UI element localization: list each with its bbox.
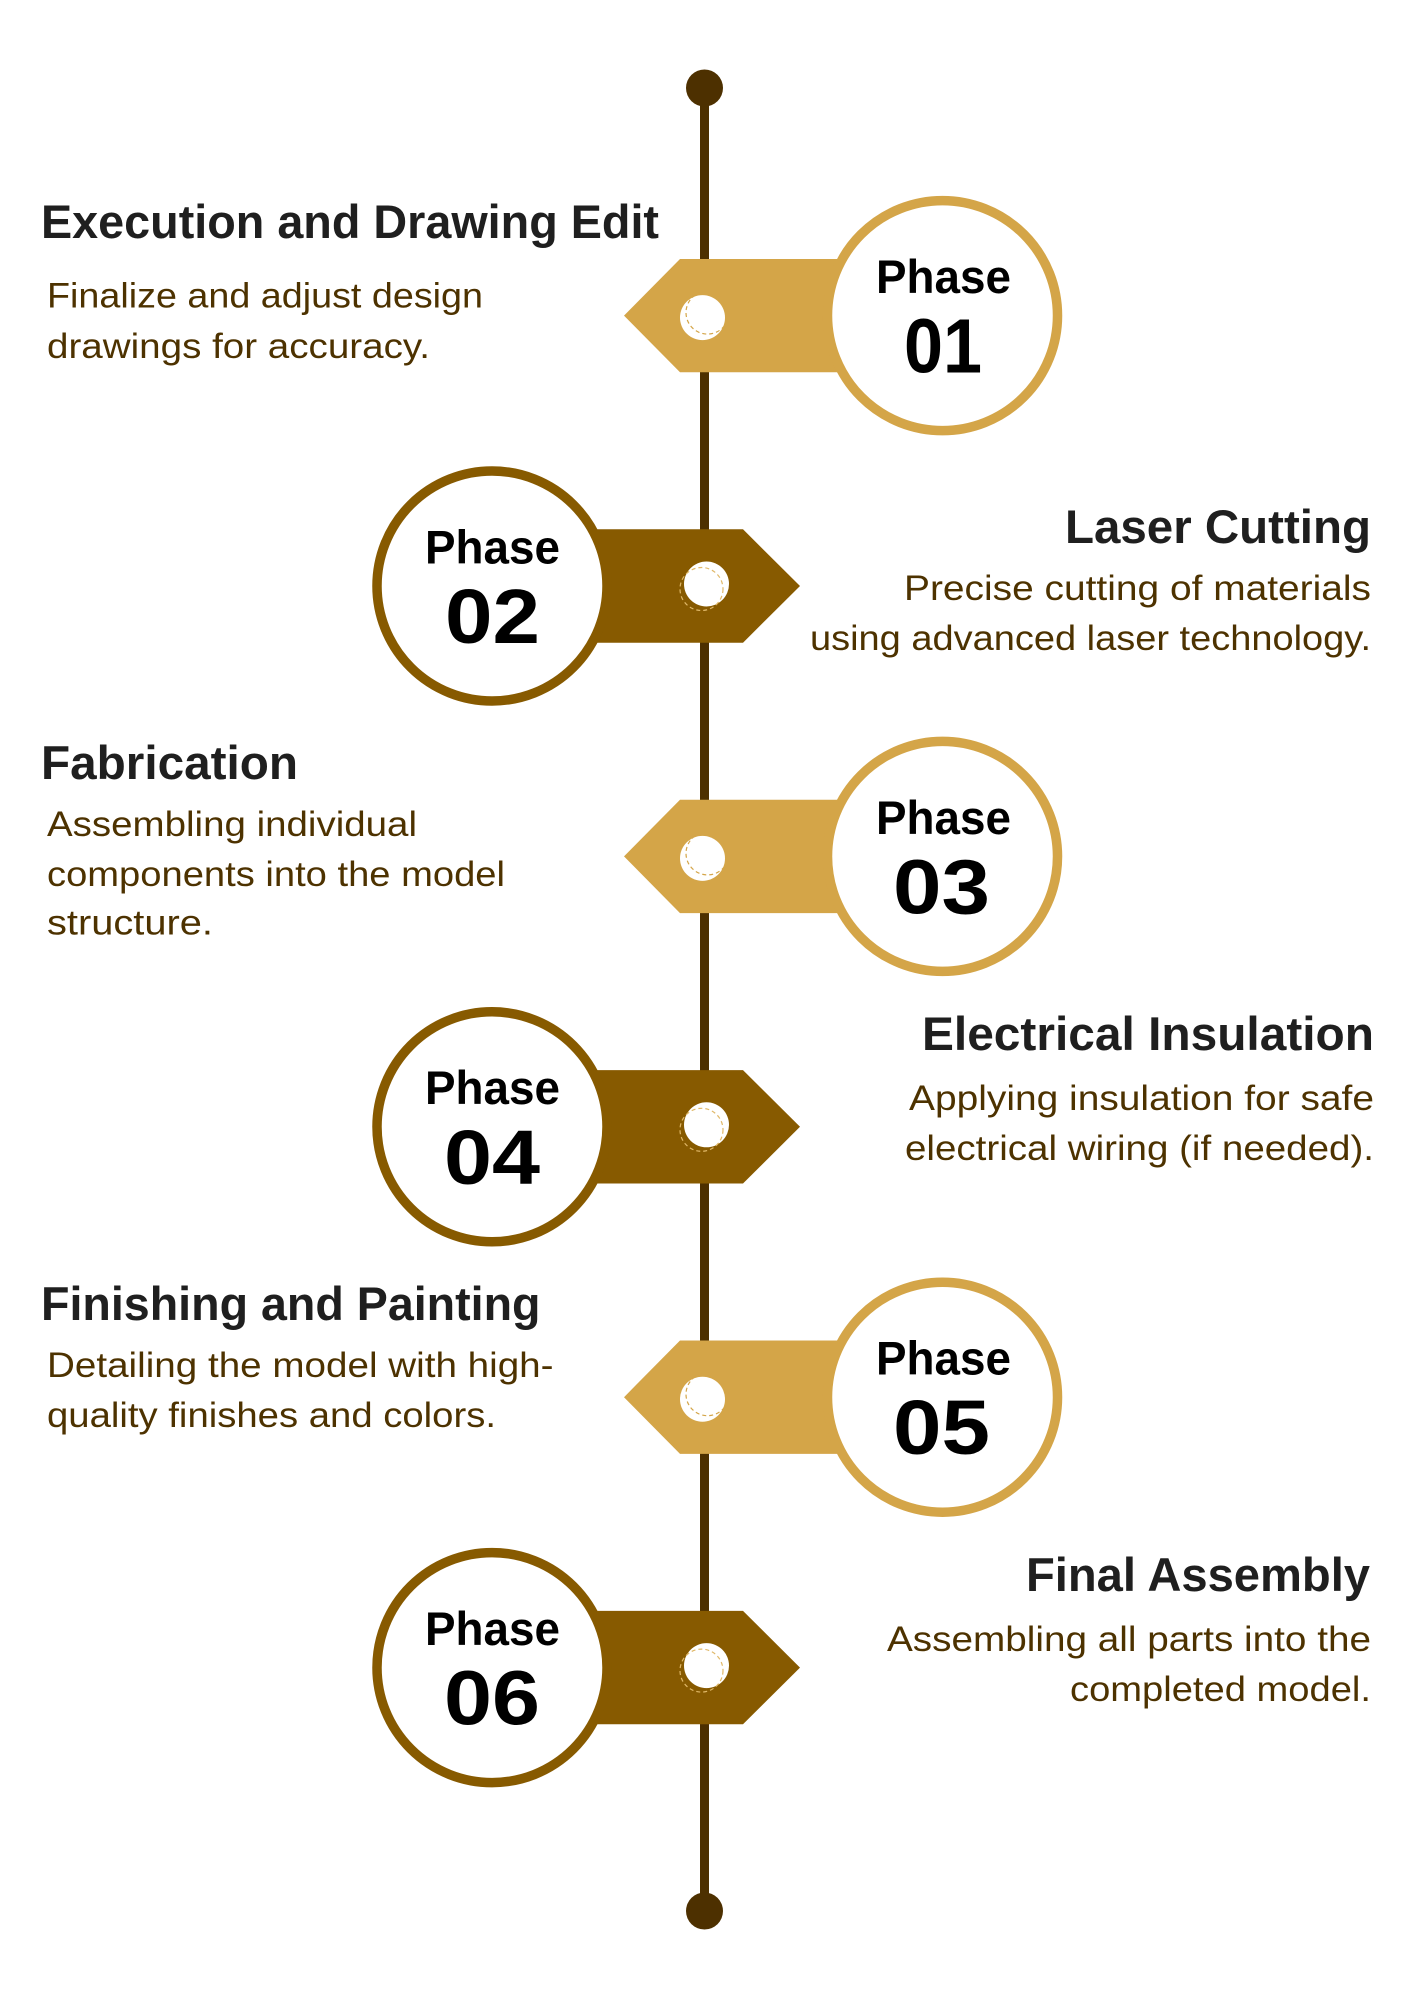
description 03: components into the model [47, 855, 505, 894]
description 01: drawings for accuracy. [47, 327, 430, 366]
badge number 06: 06 [444, 1656, 540, 1742]
badge label 03: Phase [876, 791, 1011, 844]
heading 01: Execution and Drawing Edit [41, 195, 659, 248]
description 06: Assembling all parts into the [887, 1620, 1371, 1659]
hole 05 [680, 1373, 729, 1422]
hole 06 [680, 1643, 729, 1692]
description 04: Applying insulation for safe [909, 1079, 1374, 1118]
hole 01 [680, 291, 729, 340]
arrow tag 05 [624, 1340, 945, 1454]
hole 04 [680, 1102, 729, 1151]
badge label 04: Phase [425, 1061, 560, 1114]
hole 03 [680, 832, 729, 881]
panel: phase 02 [377, 471, 1371, 701]
description 05: Detailing the model with high- [47, 1346, 554, 1385]
badge number 02: 02 [445, 574, 540, 660]
heading 05: Finishing and Painting [41, 1277, 540, 1330]
description 06: completed model. [1070, 1670, 1371, 1709]
badge circle 01 [828, 201, 1058, 431]
panel: phase 06 [377, 1548, 1371, 1783]
panel: phase 04 [377, 1007, 1374, 1242]
heading 04: Electrical Insulation [922, 1007, 1374, 1060]
description 02 [810, 569, 1371, 658]
arrow tag 06 [490, 1611, 800, 1724]
description 05: quality finishes and colors. [47, 1396, 496, 1435]
arrow tag 02 [490, 529, 800, 643]
description 01: Finalize and adjust design [47, 276, 483, 316]
badge label 02: Phase [425, 520, 560, 574]
badge label 06: Phase [425, 1602, 560, 1655]
badge number 01: 01 [904, 304, 982, 390]
heading 06: Final Assembly [1026, 1548, 1370, 1601]
arrow tag 04 [490, 1070, 800, 1184]
badge number 05: 05 [893, 1385, 990, 1471]
panel: phase 05 [41, 1277, 1058, 1512]
badge circle 05 [828, 1282, 1058, 1512]
description 03: structure. [47, 904, 213, 942]
badge number 04: 04 [444, 1115, 540, 1201]
badge circle 06 [377, 1553, 607, 1783]
hole 02 [680, 562, 729, 610]
description 02: using advanced laser technology. [810, 619, 1371, 658]
heading 02: Laser Cutting [1065, 500, 1371, 553]
description 06 [887, 1620, 1371, 1709]
description 02: Precise cutting of materials [904, 569, 1371, 608]
timeline spine with end dots [686, 70, 723, 1930]
badge label 05: Phase [876, 1332, 1011, 1385]
description 03 [47, 805, 505, 942]
description 04: electrical wiring (if needed). [905, 1129, 1374, 1168]
description 05 [47, 1346, 554, 1435]
badge circle 04 [377, 1012, 607, 1242]
badge circle 03 [828, 741, 1058, 971]
panel: phase 03 [41, 736, 1058, 971]
description 01 [47, 276, 483, 366]
description 03: Assembling individual [47, 805, 417, 844]
heading 03: Fabrication [41, 736, 298, 789]
description 04 [905, 1079, 1374, 1168]
arrow tag 01 [624, 259, 945, 372]
panel: phase 01 [41, 195, 1058, 431]
arrow tag 03 [624, 800, 945, 913]
badge number 03: 03 [893, 844, 990, 930]
badge label 01: Phase [876, 250, 1011, 303]
badge circle 02 [377, 471, 607, 701]
